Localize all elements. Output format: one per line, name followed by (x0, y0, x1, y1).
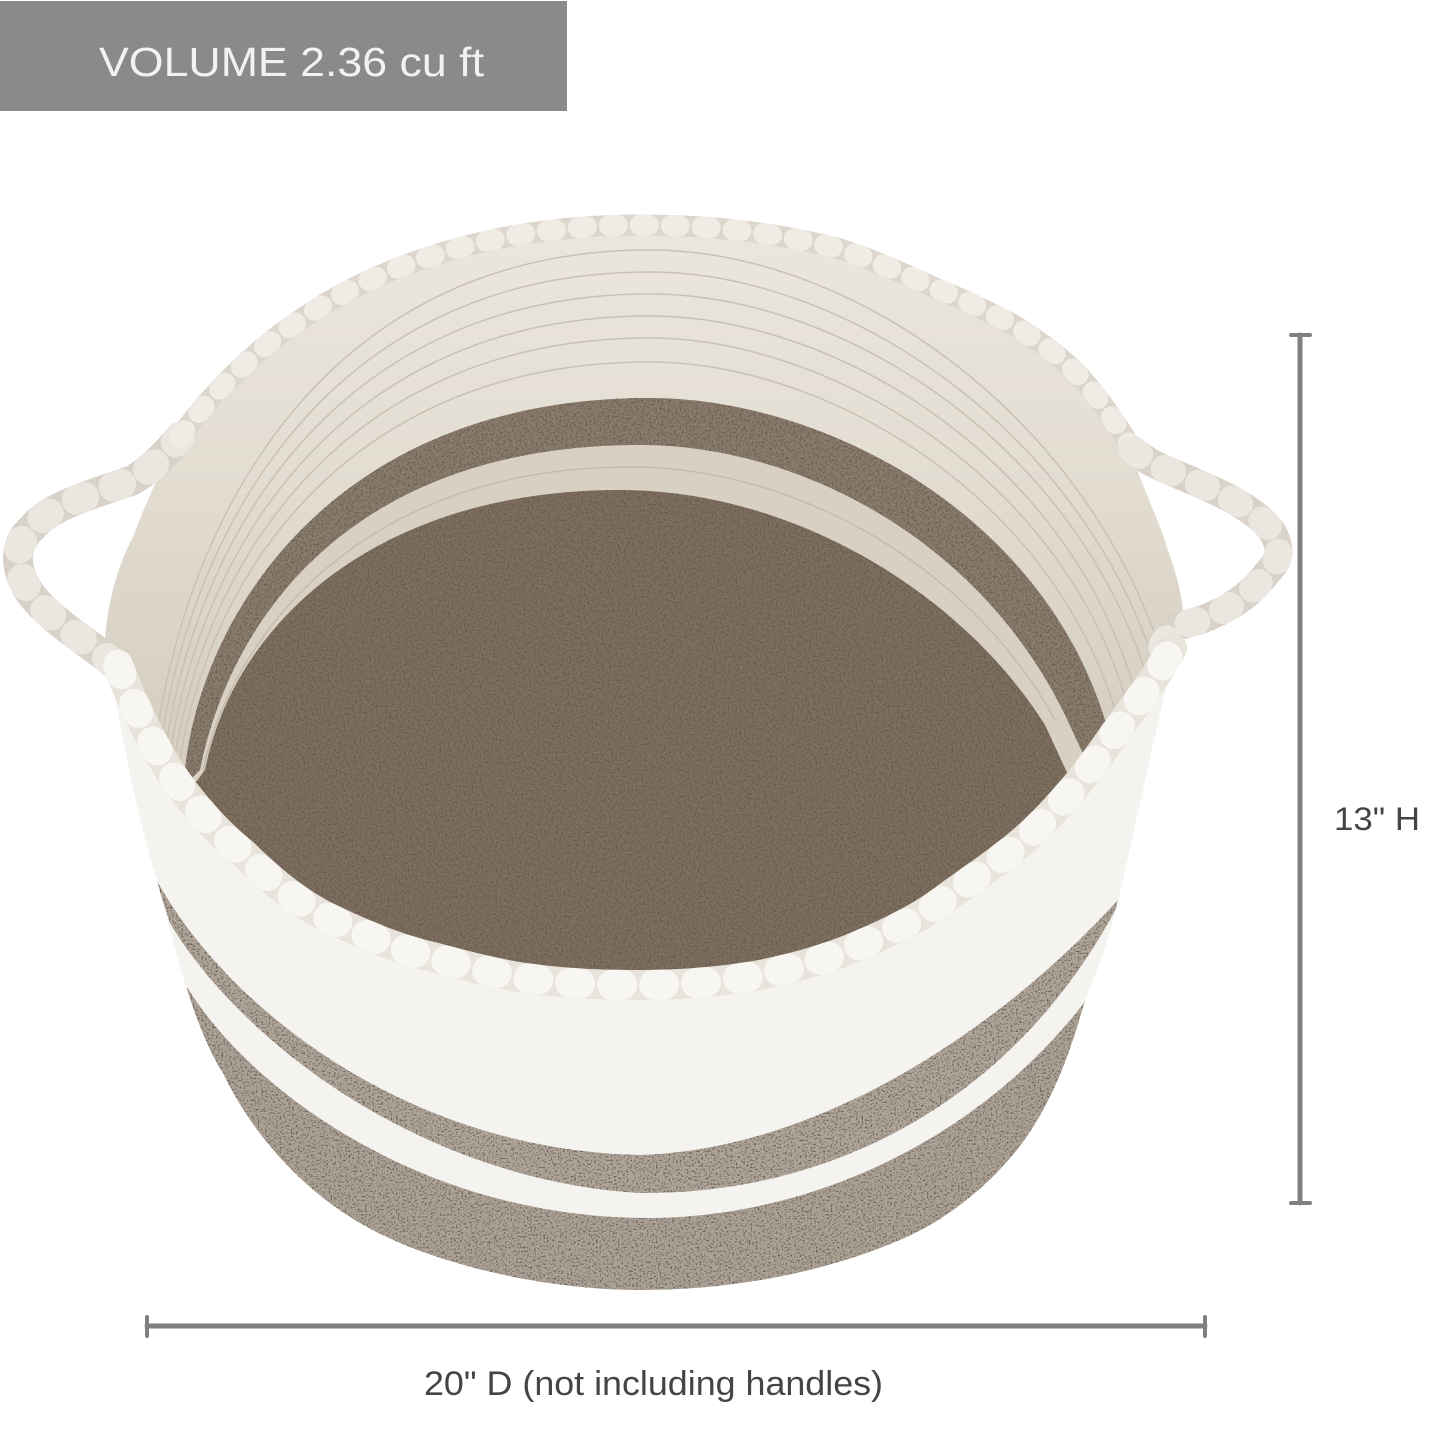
volume banner (0, 1, 567, 111)
outer stripe two (187, 987, 1090, 1300)
back rim rope (180, 225, 1133, 450)
basket interior wall (90, 215, 1200, 1000)
right handle (1133, 450, 1279, 652)
stripe texture (158, 883, 1116, 1290)
volume banner: VOLUME 2.36 cu ft (99, 39, 485, 85)
basket outer body (115, 686, 1166, 1290)
twisted rope rim and handles (18, 225, 1279, 985)
basket floor (196, 490, 1067, 970)
left handle (18, 437, 180, 663)
diameter dimension line (147, 1317, 1205, 1336)
basket photo (18, 215, 1279, 1300)
inner texture (170, 390, 1120, 1000)
height dimension line (1291, 335, 1310, 1203)
outer stripe one (155, 877, 1118, 1193)
inner brown stripe (185, 398, 1106, 778)
front rim rope (118, 648, 1172, 985)
diameter label: 20" D (not including handles) (424, 1365, 883, 1403)
inner cream band (192, 445, 1082, 782)
height label: 13" H (1334, 801, 1420, 837)
